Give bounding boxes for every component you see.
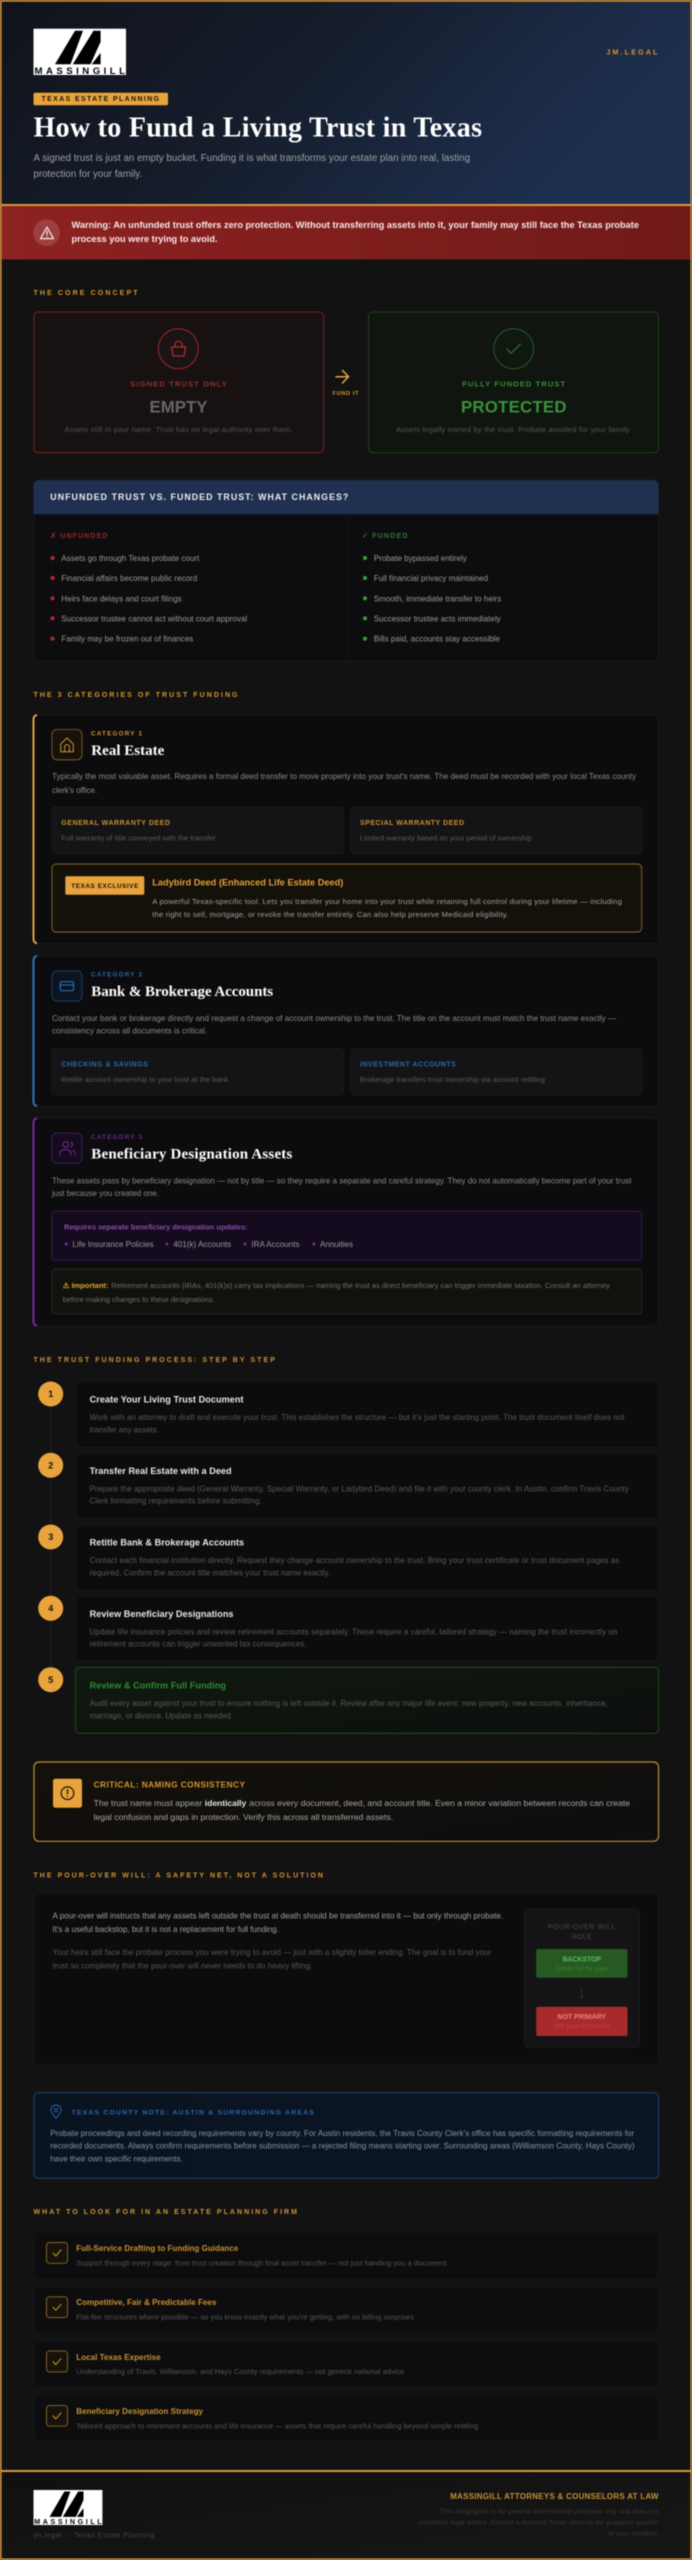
arrow: fund it — [332, 370, 359, 397]
footer logo — [34, 2490, 102, 2526]
explanation text: It's a useful backstop, but it is not a replacement for full funding. — [52, 1925, 279, 1934]
description: clerk's office. — [52, 786, 97, 795]
warning text: process you were trying to avoid. — [72, 234, 218, 244]
deed card: general warranty: GENERAL WARRANTY DEED — [61, 820, 170, 827]
account card: checking: CHECKING & SAVINGS — [61, 1062, 148, 1068]
description: just because you created one. — [51, 1189, 159, 1198]
step 1 — [38, 1381, 658, 1447]
category title: Beneficiary Designation Assets — [91, 1147, 292, 1163]
item: full service — [34, 2232, 658, 2279]
deed card: special warranty — [351, 807, 642, 854]
step 2: 2 — [48, 1460, 53, 1470]
callout: ladybird deed — [52, 864, 642, 932]
callout: Texas county note: Probate proceedings and deed recording requirements vary by county. For Austin residents, the Travis County Clerk's office has specific formatting requirements for — [50, 2129, 635, 2138]
explanation text: Your heirs still face the probate process you were trying to avoid — just with a slightly tidier ending. The goal is to fund your — [52, 1948, 492, 1957]
callout: critical naming consistency: identically — [205, 1798, 247, 1808]
disclaimer: to your situation. — [608, 2530, 659, 2538]
status: EMPTY — [150, 398, 208, 417]
column: funded: Probate bypassed entirely — [374, 554, 467, 563]
table title: UNFUNDED TRUST VS. FUNDED TRUST: WHAT CHANGES? — [50, 492, 348, 502]
footer — [0, 2470, 692, 2560]
step 5 — [38, 1667, 658, 1733]
list: beneficiary updates: Annuities — [320, 1240, 353, 1249]
checklist — [34, 2232, 658, 2441]
disclaimer: This infographic is for general informational purposes only and does not — [440, 2508, 659, 2516]
callout: ladybird deed: the right to sell, mortgage, or revoke the transfer entirely. Can also help preserve Medicaid eligibility. — [152, 910, 508, 919]
callout: Texas county note — [34, 2093, 658, 2178]
panel: category 1 real estate — [33, 715, 658, 943]
callout: Texas county note: TEXAS COUNTY NOTE: AUSTIN & SURROUNDING AREAS — [72, 2109, 314, 2116]
column: funded: Full financial privacy maintained — [374, 574, 488, 583]
diagram: pour-over role: POUR-OVER WILL — [548, 1924, 615, 1931]
callout: important tax note: Retirement accounts (IRAs, 401(k)s) carry tax implications — naming the trust as direct beneficiary can trigger immediate taxation. Consult an attorney — [111, 1281, 610, 1290]
panel: fully funded trust — [368, 312, 658, 453]
explanation text: A pour-over will instructs that any assets left outside the trust at death should be transferred into it — but only through probate. — [52, 1912, 503, 1920]
category label: CATEGORY 1 — [91, 731, 142, 738]
label: FULLY FUNDED TRUST — [462, 379, 566, 388]
disclaimer — [418, 2508, 659, 2538]
category label: CATEGORY 2 — [91, 972, 142, 979]
category badge — [34, 93, 168, 105]
subtitle — [34, 153, 470, 180]
column: unfunded: ✗ UNFUNDED — [50, 532, 107, 540]
timeline: steps — [38, 1381, 658, 1733]
step 5: 5 — [48, 1675, 53, 1685]
step 1: 1 — [48, 1389, 53, 1399]
item: beneficiary strategy — [34, 2396, 658, 2441]
icon: house — [52, 730, 82, 760]
badge: Texas exclusive: TEXAS EXCLUSIVE — [71, 883, 138, 890]
description: Contact your bank or brokerage directly and request a change of account ownership to the trust. The title on the account must match the trust name exactly — — [52, 1014, 617, 1023]
logo: Massingill — [34, 29, 126, 77]
item: beneficiary strategy: Tailored approach to retirement accounts and life insurance — assets that require careful handling beyond simple retitling — [76, 2421, 478, 2430]
item: local expertise — [34, 2341, 658, 2387]
list: beneficiary updates: 401(k) Accounts — [173, 1240, 231, 1249]
step 3: Retitle Bank & Brokerage Accounts — [90, 1538, 244, 1548]
callout: important tax note — [52, 1269, 642, 1314]
icon: alert — [53, 1779, 82, 1808]
item: full service: Full-Service Drafting to Funding Guidance — [76, 2244, 239, 2253]
heading: core concept: THE CORE CONCEPT — [34, 290, 138, 297]
step 1: transfer any assets. — [90, 1425, 159, 1434]
step 4 — [38, 1596, 658, 1661]
disclaimer: constitute legal advice. Consult a licensed Texas attorney for guidance specific — [418, 2520, 659, 2526]
warning banner — [0, 206, 692, 260]
step 5: Review & Confirm Full Funding — [90, 1680, 226, 1690]
step 5: Audit every asset against your trust to ensure nothing is left outside it. Review after any major life event: new property, new accounts, inheritance, — [90, 1699, 608, 1708]
icon: empty bucket — [158, 329, 198, 369]
step 1: Create Your Living Trust Document — [90, 1395, 244, 1405]
account card: checking — [52, 1049, 343, 1095]
description — [52, 772, 636, 795]
callout: important tax note: before making changes to these designations. — [63, 1295, 215, 1304]
list: beneficiary updates — [52, 1211, 642, 1260]
description: Typically the most valuable asset. Requires a formal deed transfer to move property into your trust's name. The deed must be recorded with your local Texas county — [52, 772, 636, 781]
column: funded: ✓ FUNDED — [362, 533, 408, 540]
column: unfunded: Financial affairs become public record — [61, 574, 197, 583]
subtitle: protection for your family. — [34, 169, 142, 180]
status: PROTECTED — [461, 398, 566, 417]
site label: JM.LEGAL — [606, 47, 658, 56]
callout: ladybird deed: Ladybird Deed (Enhanced Life Estate Deed) — [152, 878, 343, 888]
callout: important tax note: ⚠ Important: — [63, 1281, 108, 1290]
step 2: Transfer Real Estate with a Deed — [90, 1466, 232, 1476]
panel: signed trust only — [34, 312, 324, 453]
heading: process: THE TRUST FUNDING PROCESS: STEP BY STEP — [34, 1357, 275, 1364]
label: SIGNED TRUST ONLY — [130, 379, 227, 388]
callout: critical naming consistency: The trust name must appear — [94, 1798, 202, 1808]
deed card: general warranty: Full warranty of title conveyed with the transfer — [61, 834, 216, 842]
step 3: required. Confirm the account title matches your trust name exactly. — [90, 1568, 330, 1577]
list: beneficiary updates: Requires separate beneficiary designation updates: — [64, 1222, 248, 1231]
callout: ladybird deed: A powerful Texas-specific tool. Lets you transfer your home into your trust while retaining full control during your lifetime — including — [152, 897, 622, 906]
icon: warning triangle — [33, 219, 60, 246]
comparison table — [34, 480, 658, 661]
logo: Massingill: MASSINGILL — [34, 66, 125, 77]
item: local expertise: Local Texas Expertise — [76, 2353, 161, 2362]
column: funded: Bills paid, accounts stay accessible — [374, 635, 501, 644]
description: Assets legally owned by the trust. Probate avoided for your family. — [396, 425, 631, 434]
backstop block: BACKSTOP — [563, 1956, 601, 1963]
callout: critical naming consistency — [34, 1762, 658, 1841]
firm name: MASSINGILL ATTORNEYS & COUNSELORS AT LAW — [450, 2492, 659, 2501]
column: funded: Smooth, immediate transfer to heirs — [374, 594, 501, 603]
diagram: pour-over role — [524, 1909, 640, 2047]
not primary block — [536, 2007, 628, 2036]
deed card: special warranty: Limited warranty based on your period of ownership — [360, 834, 532, 842]
step 2 — [38, 1453, 658, 1518]
backstop block: Safety net for gaps — [555, 1966, 608, 1972]
item: local expertise: Understanding of Travis, Williamson, and Hays County requirements — not generic national advice — [76, 2367, 404, 2376]
step 3 — [38, 1524, 658, 1590]
icon: check — [494, 329, 534, 369]
step 4: retirement accounts can trigger unwanted tax consequences. — [90, 1640, 307, 1649]
diagram: pour-over role: ROLE — [572, 1934, 592, 1941]
badge: Texas exclusive — [65, 876, 144, 895]
category label: CATEGORY 3 — [91, 1134, 142, 1141]
category title: Real Estate — [91, 743, 165, 759]
heading: what to look for: WHAT TO LOOK FOR IN AN ESTATE PLANNING FIRM — [34, 2209, 297, 2216]
heading: pour-over will: THE POUR-OVER WILL: A SAFETY NET, NOT A SOLUTION — [34, 1872, 323, 1880]
description — [51, 1177, 632, 1198]
not primary block: Still goes to probate — [554, 2023, 610, 2030]
callout: Texas county note: have their own specific requirements. — [50, 2154, 183, 2164]
step 1: Work with an attorney to draft and execute your trust. This establishes the structure — but it's just the starting point. The trust document itself does not — [90, 1413, 625, 1422]
item: beneficiary strategy: Beneficiary Designation Strategy — [76, 2407, 204, 2416]
callout: critical naming consistency: CRITICAL: NAMING CONSISTENCY — [94, 1780, 245, 1790]
description: consistency across all documents is critical. — [52, 1027, 207, 1036]
list: beneficiary updates: Life Insurance Policies — [72, 1240, 154, 1249]
column: unfunded: Assets go through Texas probate court — [61, 554, 200, 563]
deed card: general warranty — [52, 807, 343, 854]
callout: critical naming consistency: across every document, deed, and account title. Even a minor variation between records can create — [249, 1798, 630, 1808]
callout: critical naming consistency: legal confusion and gaps in protection. Verify this across all transferred assets. — [94, 1812, 393, 1822]
account card: investment: INVESTMENT ACCOUNTS — [360, 1062, 456, 1068]
account card: investment: Brokerage transfers trust ownership via account retitling — [360, 1075, 545, 1084]
description — [52, 1014, 617, 1036]
subtitle: A signed trust is just an empty bucket. Funding it is what transforms your estate plan into real, lasting — [34, 153, 470, 164]
arrow: down — [580, 1988, 583, 1998]
account card: investment — [351, 1049, 642, 1095]
step 2: Prepare the appropriate deed (General Warranty, Special Warranty, or Ladybird Deed) and file it with your county clerk. In Austin, confirm Travis County — [90, 1485, 629, 1494]
explanation text: trust so completely that the pour-over will never needs to do heavy lifting. — [52, 1962, 312, 1970]
category title: Bank & Brokerage Accounts — [91, 984, 273, 1000]
panel: category 2 bank accounts — [33, 956, 658, 1106]
explanation text — [52, 1912, 503, 1970]
footer site line: jm.legal · Texas Estate Planning — [32, 2530, 154, 2539]
column: unfunded: Heirs face delays and court filings — [61, 594, 182, 603]
backstop block — [536, 1949, 628, 1978]
list: beneficiary updates: IRA Accounts — [252, 1240, 300, 1249]
header hero — [0, 0, 692, 204]
item: fees — [34, 2287, 658, 2333]
warning text — [72, 220, 639, 244]
item: fees: Flat-fee structures where possible — so you know exactly what you're getting, with no billing surprises — [76, 2312, 414, 2321]
deed card: special warranty: SPECIAL WARRANTY DEED — [360, 820, 464, 827]
column: unfunded: Family may be frozen out of finances — [61, 635, 193, 644]
footer logo: MASSINGILL — [34, 2517, 102, 2526]
heading: categories: THE 3 CATEGORIES OF TRUST FUNDING — [34, 692, 238, 699]
step 5: marriage, or divorce. Update as needed. — [90, 1711, 233, 1720]
step 3: 3 — [48, 1532, 53, 1542]
step 2: Clerk formatting requirements before submitting. — [90, 1497, 262, 1506]
item: full service: Support through every stage: from trust creation through final asset transfer — not just handing you a document — [76, 2258, 447, 2267]
account card: checking: Retitle account ownership to your trust at the bank — [61, 1075, 229, 1084]
item: fees: Competitive, Fair & Predictable Fees — [76, 2298, 217, 2307]
title: How to Fund a Living Trust in Texas — [34, 113, 482, 144]
step 4: 4 — [48, 1604, 53, 1614]
panel: pour-over will — [34, 1893, 658, 2064]
step 3: Contact each financial institution directly. Request they change account ownership to the trust. Bring your trust certificate or trust document pages as — [90, 1556, 619, 1565]
column: funded — [362, 533, 501, 644]
callout: Texas county note: recorded documents. Always confirm requirements before submission — a rejected filing means starting over. Surrounding areas (Williamson County, Hays County) — [50, 2142, 635, 2150]
step 4: Review Beneficiary Designations — [90, 1609, 233, 1619]
icon: map pin — [51, 2105, 61, 2118]
icon: bank card — [52, 971, 82, 1001]
category badge: TEXAS ESTATE PLANNING — [42, 96, 159, 103]
panel: category 3 beneficiary assets — [33, 1118, 658, 1326]
column: funded: Successor trustee acts immediately — [374, 614, 501, 623]
not primary block: NOT PRIMARY — [558, 2014, 606, 2021]
column: unfunded — [50, 532, 247, 644]
arrow: fund it: FUND IT — [332, 391, 359, 397]
icon: people — [52, 1133, 82, 1163]
step 4: Update life insurance policies and review retirement accounts separately. These require a careful, tailored strategy — naming the trust incorrectly on — [90, 1628, 617, 1637]
column: unfunded: Successor trustee cannot act without court approval — [61, 614, 247, 623]
description: Assets still in your name. Trust has no legal authority over them. — [64, 425, 292, 434]
description: These assets pass by beneficiary designation — not by title — so they require a separate and careful strategy. They do not automatically become part of your trust — [52, 1177, 632, 1186]
warning text: Warning: An unfunded trust offers zero protection. Without transferring assets into it, your family may still face the Texas probate — [72, 220, 639, 230]
